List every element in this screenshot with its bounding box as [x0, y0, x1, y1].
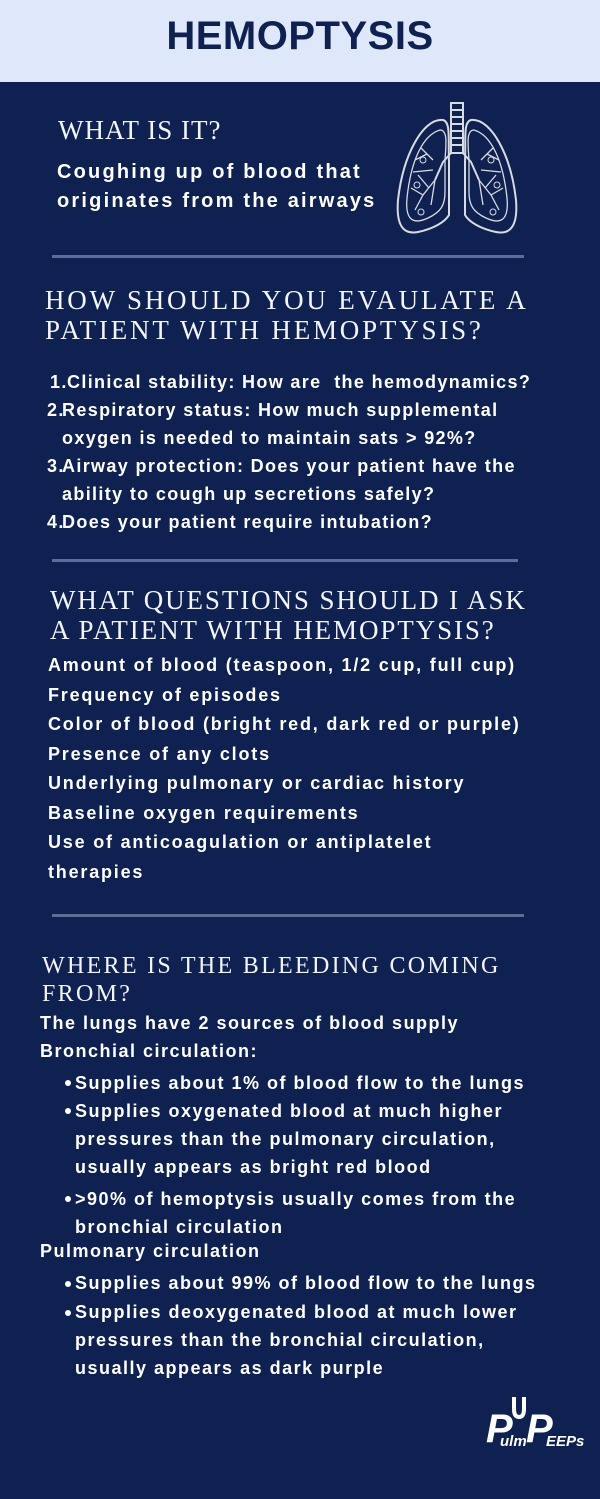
logo: PulmPEEPs: EEPs	[546, 1433, 584, 1450]
bronchial bullets: >90% of hemoptysis usually comes from the	[75, 1189, 516, 1209]
bronchial bullets: Supplies about 1% of blood flow to the lungs	[75, 1073, 525, 1093]
heading: source: WHERE IS THE BLEEDING COMING	[42, 953, 501, 979]
pulmonary bullets: usually appears as dark purple	[75, 1358, 384, 1378]
heading: what is it: WHAT IS IT?	[58, 115, 221, 145]
numbered list: oxygen is needed to maintain sats > 92%?	[62, 428, 477, 448]
bronchial label: Bronchial circulation:	[40, 1041, 258, 1061]
logo: PulmPEEPs: ulm	[500, 1433, 527, 1450]
heading: questions: A PATIENT WITH HEMOPTYSIS?	[50, 615, 496, 645]
question list: Amount of blood (teaspoon, 1/2 cup, full cup)	[48, 655, 516, 675]
question list: Baseline oxygen requirements	[48, 802, 360, 822]
definition text: Coughing up of blood that	[57, 161, 362, 183]
bronchial bullets	[65, 1073, 525, 1237]
section: source of bleeding	[40, 953, 536, 1378]
numbered list: ability to cough up secretions safely?	[62, 484, 435, 504]
definition text: originates from the airways	[57, 190, 376, 212]
logo: PulmPEEPs: P	[486, 1407, 513, 1451]
question list	[48, 655, 521, 882]
question list: Underlying pulmonary or cardiac history	[48, 773, 465, 793]
question list: therapies	[48, 862, 144, 882]
question list: Frequency of episodes	[48, 684, 282, 704]
question list: Use of anticoagulation or antiplatelet	[48, 832, 432, 852]
heading: evaluate: PATIENT WITH HEMOPTYSIS?	[45, 315, 484, 345]
pulmonary label: Pulmonary circulation	[40, 1241, 261, 1261]
numbered list	[47, 372, 531, 532]
heading: questions	[50, 585, 527, 645]
section: what is it	[57, 115, 376, 212]
definition text	[57, 161, 376, 212]
heading: evaluate: HOW SHOULD YOU EVAULATE A	[45, 285, 528, 315]
logo: PulmPEEPs: P	[526, 1407, 553, 1451]
numbered list: 1.	[50, 372, 68, 392]
pulmonary bullets: Supplies about 99% of blood flow to the lungs	[75, 1273, 536, 1293]
numbered list: 3.	[47, 456, 65, 476]
heading: source: FROM?	[42, 981, 132, 1007]
title: HEMOPTYSIS	[166, 14, 434, 58]
heading: evaluate	[45, 285, 528, 345]
numbered list: 2.	[47, 400, 65, 420]
bronchial bullets: bronchial circulation	[75, 1217, 284, 1237]
question list: Color of blood (bright red, dark red or purple)	[48, 714, 521, 734]
numbered list: Does your patient require intubation?	[62, 512, 433, 532]
intro text: The lungs have 2 sources of blood supply	[40, 1013, 459, 1033]
logo: PulmPEEPs	[486, 1397, 584, 1451]
pulmonary bullets: Supplies deoxygenated blood at much lower	[75, 1302, 518, 1322]
icon: lungs	[396, 102, 518, 234]
header band	[0, 0, 600, 82]
section: questions	[48, 585, 527, 882]
question list: Presence of any clots	[48, 744, 271, 764]
section: evaluation	[45, 285, 531, 532]
bronchial bullets: usually appears as bright red blood	[75, 1157, 432, 1177]
heading: questions: WHAT QUESTIONS SHOULD I ASK	[50, 585, 527, 615]
heading: source	[42, 953, 501, 1007]
pulmonary bullets	[65, 1273, 536, 1378]
numbered list: Clinical stability: How are the hemodynamics?	[67, 372, 531, 392]
numbered list: 4.	[47, 512, 65, 532]
pulmonary bullets: pressures than the bronchial circulation,	[75, 1330, 485, 1350]
bronchial bullets: Supplies oxygenated blood at much higher	[75, 1101, 503, 1121]
numbered list: Respiratory status: How much supplemental	[62, 400, 498, 420]
bronchial bullets: pressures than the pulmonary circulation,	[75, 1129, 496, 1149]
numbered list: Airway protection: Does your patient have the	[62, 456, 516, 476]
